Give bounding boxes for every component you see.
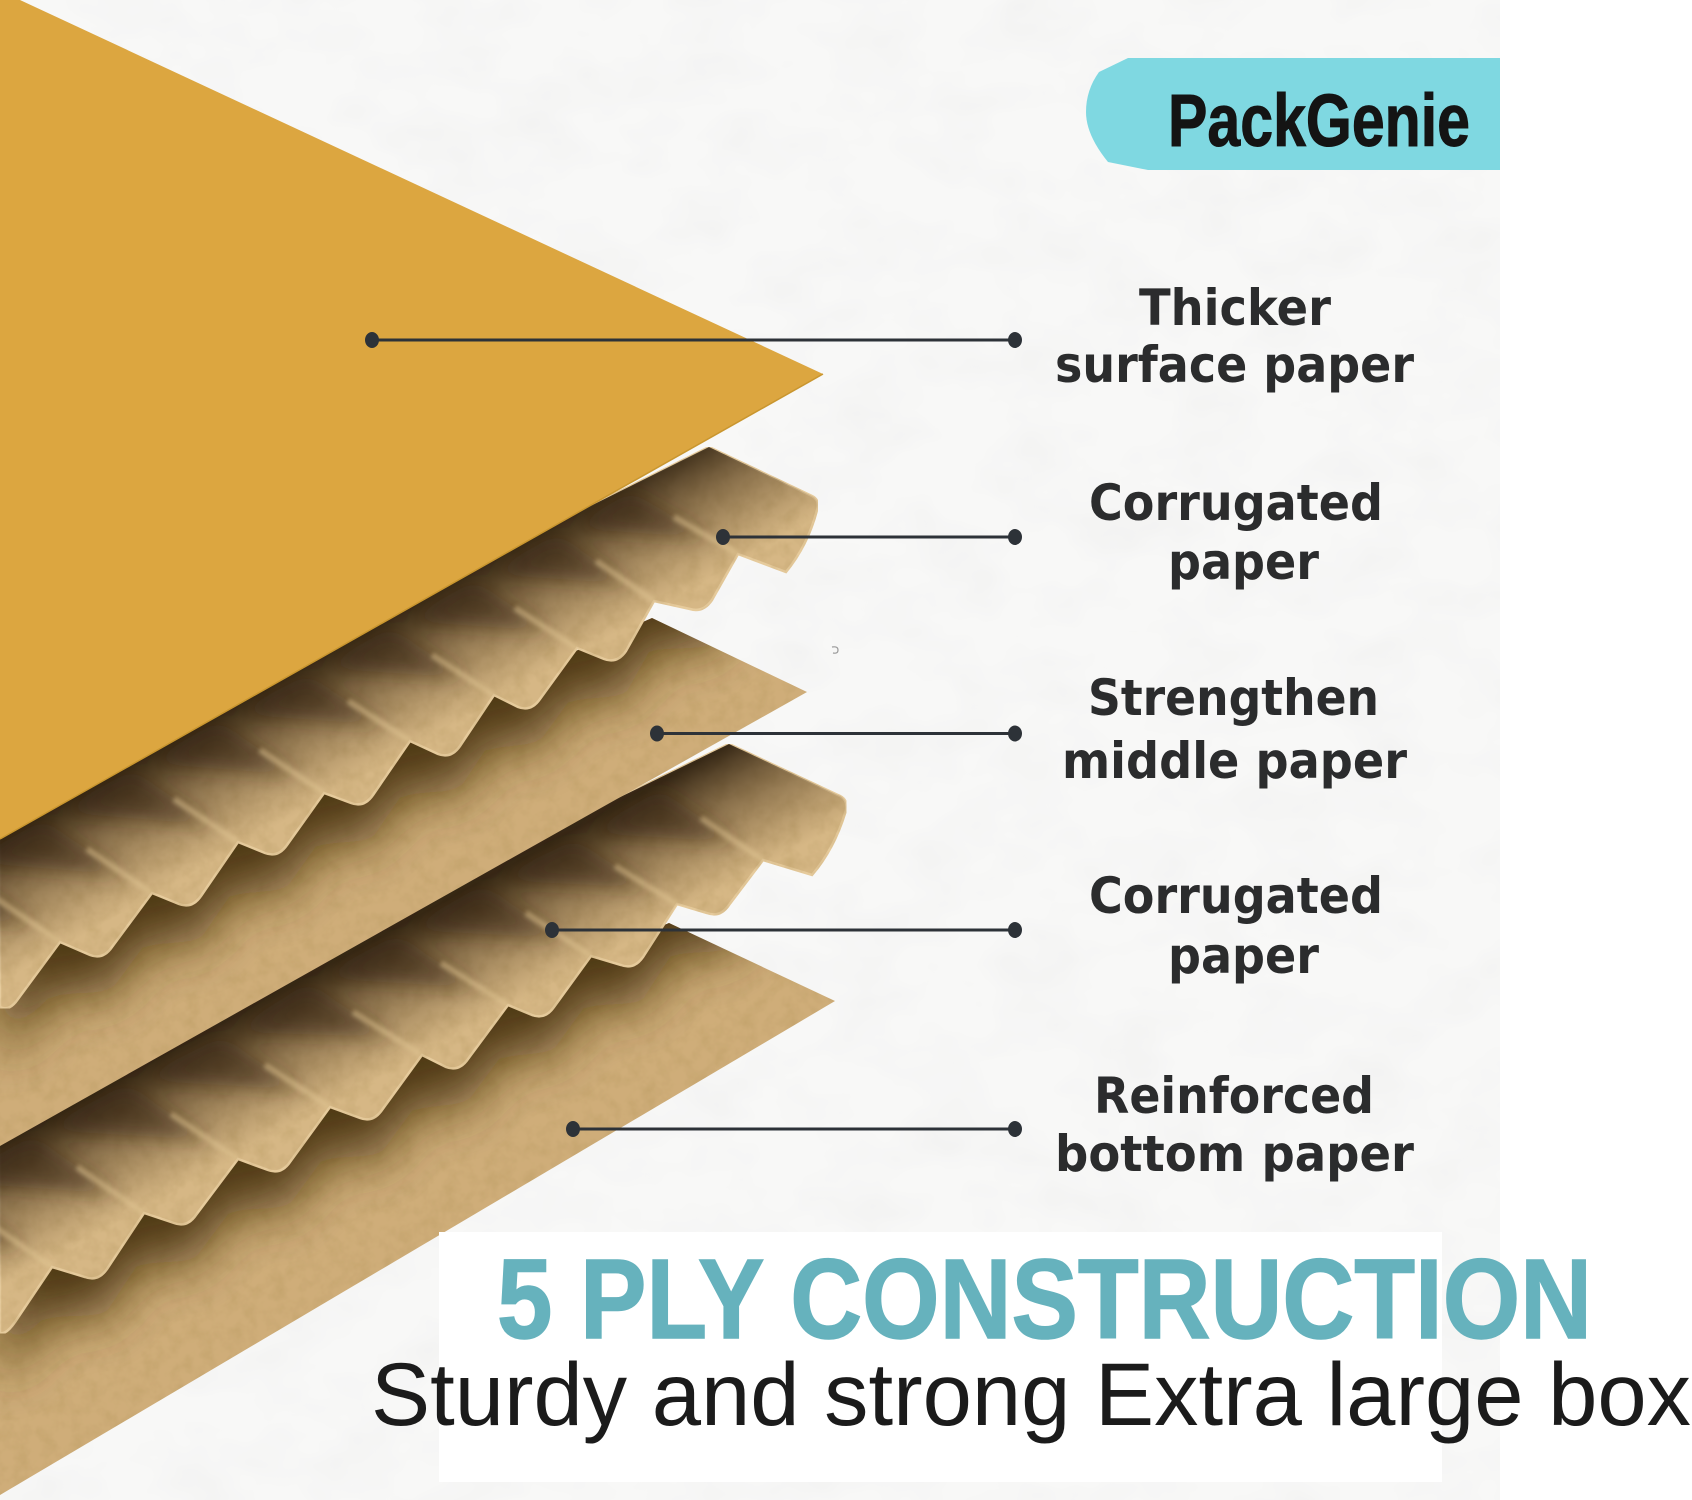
leader: surface paper	[365, 332, 1022, 348]
label: reinforced bottom paper	[1055, 1067, 1414, 1183]
brand name: PackGenie	[1168, 79, 1470, 162]
label: corrugated paper lower	[1089, 867, 1383, 985]
leader: middle paper	[650, 726, 1022, 742]
brand badge	[1086, 58, 1500, 170]
label: strengthen middle paper: Strengthen	[1088, 669, 1379, 727]
label: strengthen middle paper	[1062, 669, 1407, 790]
layer: lower corrugated paper	[0, 730, 860, 1350]
label: reinforced bottom paper: bottom paper	[1055, 1125, 1414, 1183]
label: corrugated paper upper: Corrugated	[1089, 474, 1383, 532]
leader: lower corrugated paper	[545, 922, 1022, 938]
layer: reinforced bottom paper	[0, 923, 835, 1495]
label: reinforced bottom paper: Reinforced	[1094, 1067, 1374, 1125]
layer: strengthen middle paper	[0, 618, 807, 1146]
label: corrugated paper lower: Corrugated	[1089, 867, 1383, 925]
label: thicker surface paper	[1055, 279, 1414, 394]
illustration: five paper layers	[0, 0, 860, 1495]
title panel	[439, 1232, 1442, 1482]
layer: upper corrugated paper	[0, 430, 830, 1030]
subtitle: Sturdy and strong Extra large box	[371, 1344, 1691, 1444]
leader: upper corrugated paper	[716, 529, 1022, 545]
label: thicker surface paper: Thicker	[1139, 279, 1331, 337]
label: corrugated paper upper: paper	[1168, 533, 1319, 591]
label: strengthen middle paper: middle paper	[1062, 732, 1407, 790]
label: corrugated paper upper	[1089, 474, 1383, 591]
layer: thicker surface paper	[0, 0, 823, 839]
label: thicker surface paper: surface paper	[1055, 336, 1414, 394]
label: corrugated paper lower: paper	[1168, 927, 1319, 985]
speck on background	[832, 647, 838, 653]
leader: bottom paper	[566, 1121, 1022, 1137]
